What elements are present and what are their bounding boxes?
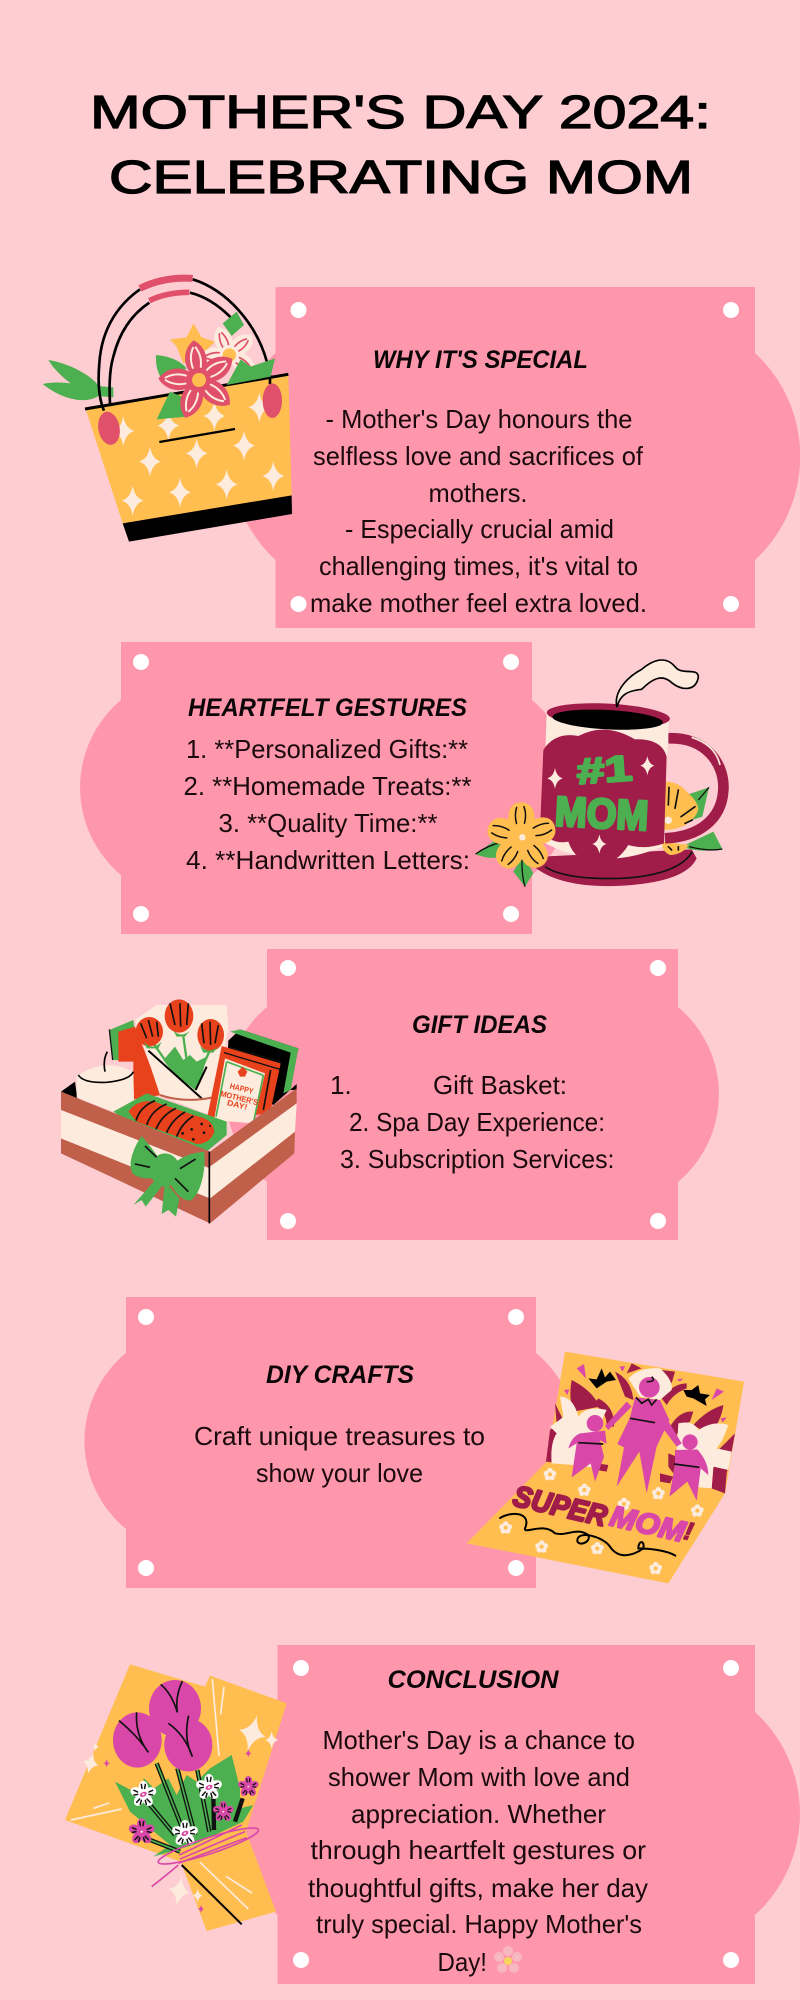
text block: heartfelt gestures list: 3. **Quality Time:** (218, 808, 438, 838)
card lettering: supermom: MOM (607, 1500, 689, 1549)
title: MOTHER'S DAY 2024: (90, 86, 711, 138)
card lettering: DAY! (226, 1098, 248, 1112)
figure: mother (605, 1377, 682, 1493)
panel: gift ideas (226, 949, 719, 1240)
card lettering: HAPPY (229, 1082, 255, 1096)
text block: conclusion (308, 1725, 648, 1977)
text block: why it's special: - Especially crucial amid (345, 514, 614, 544)
text block: why it's special: mothers. (428, 478, 528, 508)
text block: gift ideas list (330, 1070, 614, 1174)
mug lettering: #1 (575, 747, 633, 792)
icon: number one mom mug (475, 660, 723, 887)
icon: small blossom (494, 1946, 522, 1973)
icon: supermom pop-up card (467, 1352, 744, 1583)
text block: gift ideas list: 3. Subscription Services: (340, 1144, 614, 1174)
text block: diy crafts: show your love (256, 1458, 423, 1488)
text block: heartfelt gestures list: 4. **Handwritten Letters: (186, 845, 470, 875)
text block: why it's special: make mother feel extra loved. (310, 588, 647, 618)
heading: diy crafts: DIY CRAFTS (266, 1361, 414, 1389)
text block: conclusion: truly special. Happy Mother's (316, 1909, 642, 1939)
text block: gift ideas list: Gift Basket: (433, 1070, 567, 1100)
text block: conclusion: appreciation. Whether (351, 1799, 606, 1829)
panel: conclusion (233, 1645, 800, 1984)
text block: diy crafts: Craft unique treasures to (194, 1421, 485, 1451)
icon: gift basket (61, 999, 298, 1223)
text block: heartfelt gestures list: 2. **Homemade Treats:** (184, 771, 472, 801)
text block: conclusion: thoughtful gifts, make her day (308, 1873, 648, 1903)
figure: right child (669, 1434, 708, 1501)
card lettering: supermom: SUPER (510, 1480, 610, 1533)
mug lettering: MOM (554, 787, 650, 839)
heading: heartfelt gestures: HEARTFELT GESTURES (188, 694, 467, 722)
title (90, 86, 711, 203)
text block: diy crafts (194, 1421, 485, 1488)
text block: gift ideas list: 1. (330, 1070, 352, 1100)
text block: conclusion: Day! (438, 1947, 487, 1977)
panel: why it's special (230, 287, 800, 628)
text block: gift ideas list: 2. Spa Day Experience: (349, 1107, 605, 1137)
heading: why it's special: WHY IT'S SPECIAL (373, 346, 588, 374)
panel: heartfelt gestures (80, 642, 573, 934)
text block: conclusion: shower Mom with love and (328, 1762, 630, 1792)
heading: gift ideas: GIFT IDEAS (412, 1011, 547, 1039)
icon: tulip bouquet (65, 1664, 287, 1931)
text block: why it's special: selfless love and sacrifices of (313, 441, 644, 471)
card lettering (220, 1082, 259, 1112)
card lettering: supermom: ! (681, 1517, 696, 1546)
text block: heartfelt gestures list: 1. **Personalized Gifts:** (186, 734, 468, 764)
heading: conclusion: CONCLUSION (388, 1666, 559, 1694)
text block: conclusion: through heartfelt gestures or (310, 1835, 646, 1865)
text block: conclusion: Mother's Day is a chance to (322, 1725, 635, 1755)
text block: why it's special (310, 404, 647, 618)
bow (131, 1136, 205, 1217)
mug lettering (554, 747, 650, 839)
icon: flower handbag (43, 278, 292, 542)
figure: left child (568, 1415, 607, 1482)
text block: heartfelt gestures list (184, 734, 472, 875)
text block: why it's special: challenging times, it's vital to (319, 551, 638, 581)
card lettering: supermom (510, 1480, 696, 1549)
panel: diy crafts (84, 1297, 578, 1588)
card lettering: MOTHER'S (220, 1089, 259, 1107)
title: CELEBRATING MOM (109, 151, 693, 203)
text block: why it's special: - Mother's Day honours the (326, 404, 632, 434)
